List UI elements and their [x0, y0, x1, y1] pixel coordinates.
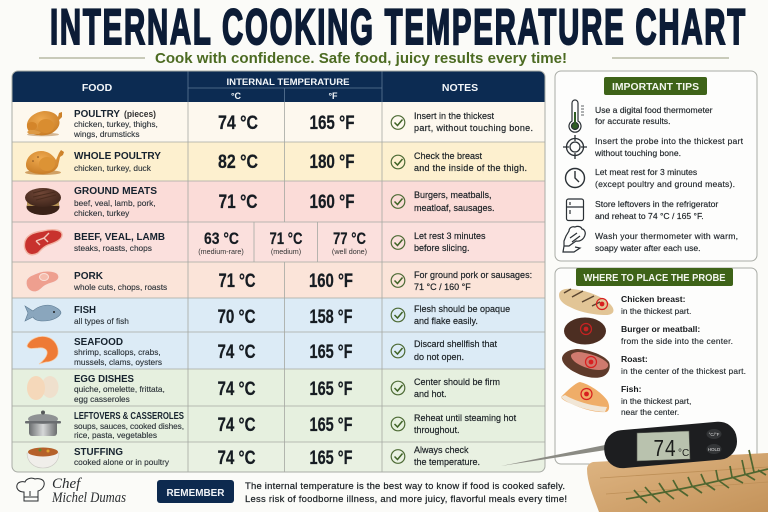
row: beef veal lamb: before slicing. [414, 243, 470, 253]
row: pork [26, 270, 532, 292]
row: poultry pieces [27, 108, 533, 139]
buttons: °C/°F [709, 432, 720, 437]
display: °C [678, 448, 689, 459]
text: roast: Roast: [621, 354, 648, 364]
icon: eggs [27, 376, 58, 400]
cutting board [587, 453, 768, 512]
row: whole poultry [25, 150, 527, 175]
row: leftovers: Reheat until steaming hot [414, 413, 517, 423]
row: ground meats: 160 °F [310, 192, 354, 213]
thermometer [501, 420, 738, 470]
icon: clock [566, 168, 584, 188]
row: whole poultry: 82 °C [218, 152, 258, 173]
row: pork: 71 °C [218, 271, 256, 292]
probe heading [576, 268, 733, 286]
icon: burger patty [25, 188, 61, 215]
text: burger: from the side into the center. [621, 336, 733, 346]
row: stuffing [27, 445, 480, 469]
row: leftovers [25, 410, 517, 440]
icon: bowl [27, 448, 59, 468]
row: ground meats: 71 °C [218, 192, 258, 213]
tips heading [604, 77, 707, 95]
tip 5: Wash your thermometer with warm, [595, 231, 738, 241]
rosemary sprig [626, 450, 768, 503]
row: beef veal lamb: (medium) [271, 247, 301, 256]
row: whole poultry: 180 °F [310, 152, 354, 173]
row: seafood: 74 °C [218, 342, 256, 363]
tip 1: Use a digital food thermometer [595, 105, 713, 115]
thermometer body [603, 420, 738, 470]
row: poultry pieces: 165 °F [310, 113, 354, 134]
row: egg dishes: 165 °F [310, 379, 352, 400]
row: egg dishes [27, 373, 500, 404]
row: egg dishes: and hot. [414, 389, 447, 399]
remember text: Less risk of foodborne illness, and more juicy, flavorful meals every time! [245, 494, 567, 505]
check icon [391, 344, 405, 358]
row: leftovers: throughout. [414, 425, 460, 435]
row: stuffing: 165 °F [310, 448, 352, 469]
row: egg dishes: egg casseroles [74, 394, 130, 404]
chef name: Chef [52, 476, 82, 492]
text: fish [621, 384, 691, 417]
row: pork: PORK [74, 270, 103, 282]
icon: pot [25, 410, 61, 436]
row: beef veal lamb: 77 °C [333, 229, 366, 248]
row: leftovers: 74 °C [218, 415, 256, 436]
row: leftovers: soups, sauces, cooked dishes, [74, 421, 184, 431]
row: poultry pieces: part, without touching bone. [414, 123, 533, 133]
check icon [391, 274, 405, 287]
text: fish: near the center. [621, 407, 679, 417]
row: beef veal lamb: (medium-rare) [198, 247, 244, 256]
icon: steak [24, 230, 62, 255]
check icon [391, 195, 405, 208]
row: fish: Flesh should be opaque [414, 304, 510, 314]
row: pork: 160 °F [309, 271, 353, 292]
text: burger: Burger or meatball: [621, 324, 700, 334]
row: fish: FISH [74, 304, 96, 316]
tip 2: without touching bone. [594, 148, 681, 158]
row: ground meats: beef, veal, lamb, pork, [74, 198, 156, 208]
check icon [391, 236, 405, 249]
text: fish: Fish: [621, 384, 642, 394]
table header: °C [231, 91, 242, 101]
panel: where to place the probe [555, 268, 757, 464]
image: burger [564, 318, 606, 344]
row: whole poultry: and the inside of the thigh. [414, 163, 527, 173]
tip 3: (except poultry and ground meats). [595, 179, 735, 189]
row: poultry pieces: Insert in the thickest [414, 111, 495, 121]
icon: thermometer [569, 100, 584, 132]
row: poultry pieces: POULTRY [74, 108, 120, 120]
image: fish fillet [561, 382, 609, 412]
row: beef veal lamb: Let rest 3 minutes [414, 231, 486, 241]
row: leftovers: 165 °F [310, 415, 352, 436]
row: stuffing: STUFFING [74, 446, 123, 458]
icon: fish [25, 305, 61, 321]
check icon [391, 308, 405, 322]
text: roast [621, 354, 746, 376]
icon: washing hands [563, 226, 585, 252]
chef name [51, 476, 126, 506]
image: roast [562, 349, 610, 378]
table header: NOTES [442, 82, 478, 94]
row: ground meats: chicken, turkey [74, 208, 130, 218]
tip 4: Store leftovers in the refrigerator [595, 199, 718, 209]
remember text [245, 481, 567, 505]
row: egg dishes: Center should be firm [414, 377, 500, 387]
tip 2: Insert the probe into the thickest part [595, 136, 744, 146]
panel: important tips [555, 71, 757, 261]
row: beef veal lamb [24, 229, 486, 256]
table header: FOOD [82, 82, 113, 94]
row: egg dishes: EGG DISHES [74, 373, 134, 385]
tips heading: IMPORTANT TIPS [612, 82, 699, 93]
row: beef veal lamb: steaks, roasts, chops [74, 243, 152, 253]
check icon [391, 381, 405, 395]
table header [12, 71, 545, 102]
tip 3: Let meat rest for 3 minutes [595, 167, 697, 177]
text: fish: in the thickest part, [621, 396, 691, 406]
row: pork: whole cuts, chops, roasts [73, 282, 167, 292]
row: egg dishes: 74 °C [218, 379, 256, 400]
tip 1 [595, 105, 713, 126]
row: ground meats: meatloaf, sausages. [414, 203, 495, 213]
row: leftovers: rice, pasta, vegetables [74, 430, 157, 440]
row: beef veal lamb: (well done) [332, 247, 367, 256]
tip 5 [595, 231, 738, 253]
display [637, 431, 690, 464]
icon: chef hat [17, 478, 44, 501]
display: 74 [653, 437, 676, 464]
footer: chef logo [17, 476, 126, 506]
tip 3 [595, 167, 735, 189]
check icon [391, 155, 405, 169]
row: poultry pieces: 74 °C [218, 113, 258, 134]
row: fish: 70 °C [218, 307, 256, 328]
row: seafood: Discard shellfish that [414, 339, 498, 349]
row: fish: all types of fish [74, 316, 129, 326]
row backgrounds [12, 102, 545, 472]
tip 2 [594, 136, 744, 158]
buttons [706, 429, 722, 454]
row: fish: and flake easily. [414, 316, 478, 326]
row: ground meats [25, 185, 495, 218]
row: beef veal lamb: 71 °C [270, 229, 302, 248]
icon: roast chicken [27, 111, 62, 136]
icon: target [563, 135, 587, 159]
row: pork: For ground pork or sausages: [414, 270, 532, 280]
row: leftovers: LEFTOVERS & CASSEROLES [74, 410, 184, 422]
text: chicken breast: in the thickest part. [621, 306, 691, 316]
tip 4 [595, 199, 718, 221]
row: beef veal lamb: 63 °C [204, 229, 239, 248]
row: seafood [27, 336, 498, 367]
tip 4: and reheat to 74 °C / 165 °F. [595, 211, 704, 221]
row: fish: 158 °F [310, 307, 352, 328]
probe [501, 445, 606, 466]
row: stuffing: Always check [414, 445, 469, 455]
row: fish [25, 304, 510, 328]
temperature table [12, 71, 545, 472]
icon: refrigerator [566, 199, 584, 220]
row: seafood: shrimp, scallops, crabs, [74, 347, 161, 357]
row: whole poultry: Check the breast [414, 151, 483, 161]
row: seafood: SEAFOOD [74, 336, 123, 348]
table header: INTERNAL TEMPERATURE [226, 77, 350, 88]
row: poultry pieces: chicken, turkey, thighs, [74, 119, 158, 129]
row: beef veal lamb: BEEF, VEAL, LAMB [74, 231, 165, 243]
text: chicken breast [621, 294, 691, 316]
row: seafood: 165 °F [310, 342, 352, 363]
probe heading: WHERE TO PLACE THE PROBE [584, 273, 726, 284]
check icon [391, 450, 405, 463]
text: chicken breast: Chicken breast: [621, 294, 686, 304]
check icon [391, 417, 405, 431]
remember badge [157, 480, 234, 503]
tip 5: soapy water after each use. [595, 243, 701, 253]
remember badge: REMEMBER [166, 488, 225, 499]
image: chicken breast [559, 289, 613, 315]
row: poultry pieces: (pieces) [124, 109, 156, 119]
chef name: Michel Dumas [51, 490, 126, 506]
text: roast: in the center of the thickest part. [621, 366, 746, 376]
row: stuffing: the temperature. [414, 457, 480, 467]
remember text: The internal temperature is the best way to know if food is cooked safely. [245, 481, 565, 492]
row: seafood: do not open. [414, 352, 464, 362]
icon: whole chicken [25, 150, 64, 175]
row: stuffing: 74 °C [218, 448, 256, 469]
row: whole poultry: WHOLE POULTRY [74, 150, 161, 162]
row: pork: 71 °C / 160 °F [414, 282, 471, 292]
icon: shrimp [27, 336, 58, 364]
check icon [391, 116, 405, 129]
buttons: HOLD [708, 447, 721, 452]
row: stuffing: cooked alone or in poultry [74, 457, 170, 467]
row: ground meats: Burgers, meatballs, [414, 190, 492, 200]
tip 1: for accurate results. [595, 116, 670, 126]
row: seafood: mussels, clams, oysters [74, 357, 162, 367]
row: ground meats: GROUND MEATS [74, 185, 157, 197]
text: burger [621, 324, 733, 346]
row: whole poultry: chicken, turkey, duck [74, 163, 152, 173]
row: egg dishes: quiche, omelette, frittata, [74, 384, 165, 394]
table header: °F [328, 91, 338, 101]
icon: pork chop [26, 271, 59, 292]
subtitle: Cook with confidence. Safe food, juicy results every time! [155, 50, 567, 67]
row: poultry pieces: wings, drumsticks [73, 129, 139, 139]
